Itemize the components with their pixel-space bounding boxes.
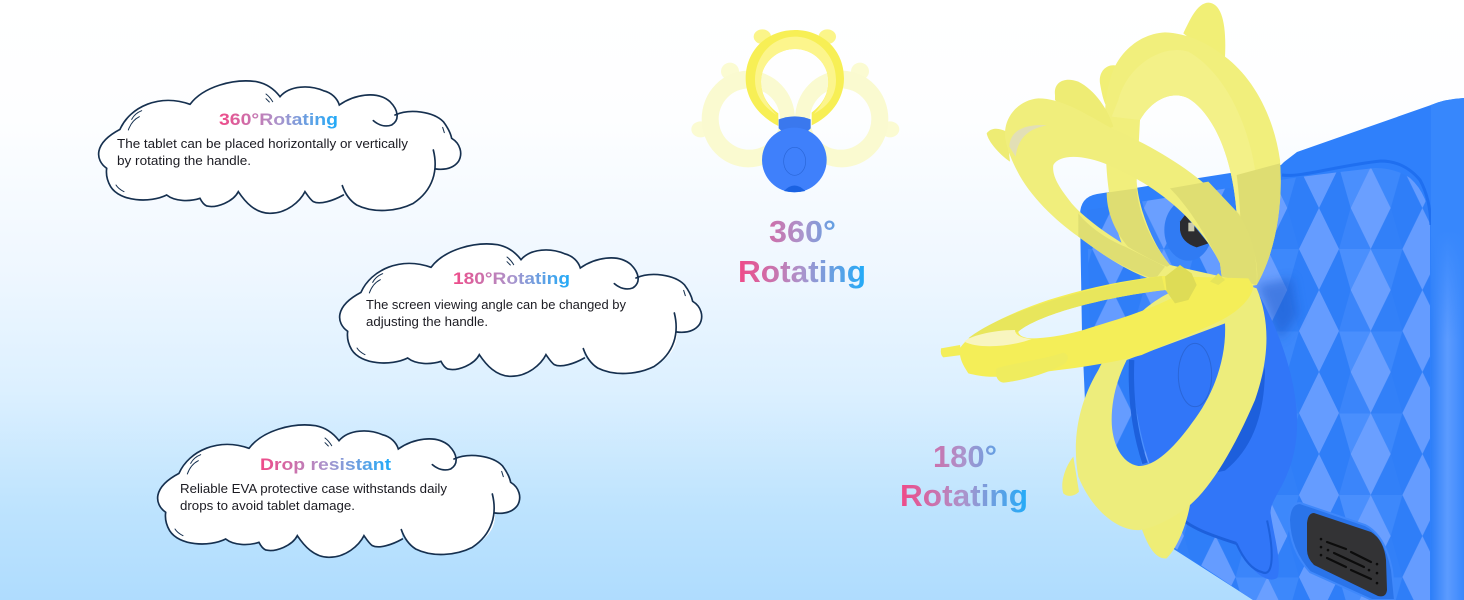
body text: Reliable EVA protective case withstands daily xyxy=(180,481,448,496)
recess detail seen through the lower ring xyxy=(1131,343,1265,473)
hinge piece xyxy=(1210,273,1225,285)
part over the tablet xyxy=(1107,163,1281,285)
tablet case body xyxy=(1080,98,1464,600)
cloud callout: 360 rotating xyxy=(99,81,461,213)
pivot knob xyxy=(1165,265,1197,303)
white inner patch xyxy=(964,330,1032,346)
ring: tilted position xyxy=(987,80,1257,293)
label: 360 rotating: Rotating xyxy=(738,254,866,289)
body text: The tablet can be placed horizontally or vertically xyxy=(117,136,409,151)
round recess xyxy=(1131,291,1297,580)
left ear xyxy=(941,345,962,357)
blue knob xyxy=(762,116,827,192)
speaker xyxy=(1289,503,1395,600)
main yellow ring xyxy=(746,29,844,126)
label: 180 rotating: Rotating xyxy=(900,478,1028,513)
cloud shape xyxy=(158,425,520,557)
body text: adjusting the handle. xyxy=(366,314,488,329)
panel ridge and right side bar xyxy=(1282,161,1431,225)
diamond textured panel xyxy=(1087,168,1430,600)
inner surface xyxy=(1112,50,1258,217)
upper band shade xyxy=(968,276,1165,338)
ring body xyxy=(1005,98,1257,293)
cloud callout: 180 rotating xyxy=(340,244,702,376)
body text: drops to avoid tablet damage. xyxy=(180,498,355,513)
pivot shadow xyxy=(1257,278,1298,340)
ears xyxy=(1062,457,1190,558)
heading: 360°Rotating xyxy=(219,110,338,129)
ring body xyxy=(960,276,1253,377)
label: 180 rotating: 180° xyxy=(933,439,997,474)
ghost ring: left xyxy=(691,63,795,167)
ring body xyxy=(1105,32,1281,285)
ears xyxy=(1100,3,1225,105)
heading: Drop resistant xyxy=(260,455,391,474)
ring: lower position xyxy=(1062,287,1266,558)
cloud shape xyxy=(99,81,461,213)
icon: small handle rotating 360 degrees xyxy=(691,29,899,192)
cloud shape xyxy=(340,244,702,376)
tablet with rotating handle xyxy=(941,3,1464,600)
ring body xyxy=(1076,287,1266,530)
ghost ring: right xyxy=(795,63,899,167)
inner rim highlight xyxy=(1009,125,1047,157)
body text: by rotating the handle. xyxy=(117,153,251,168)
ears xyxy=(987,80,1113,162)
part over the tablet xyxy=(1078,182,1257,285)
heading: 180°Rotating xyxy=(453,269,570,288)
camera xyxy=(1164,199,1212,261)
label: 360 rotating: 360° xyxy=(769,214,836,249)
cloud callout: drop resistant xyxy=(158,425,520,557)
ring: horizontal position xyxy=(941,265,1253,383)
body text: The screen viewing angle can be changed by xyxy=(366,297,626,312)
ring: upright position xyxy=(1100,3,1281,285)
bottom ear xyxy=(996,353,1068,383)
